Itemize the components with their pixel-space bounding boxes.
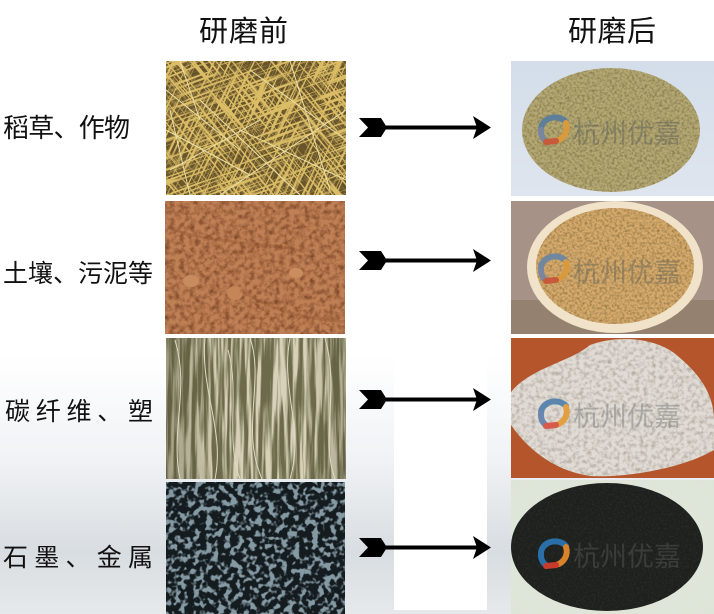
photo: straw powder after grinding bbox=[511, 61, 714, 196]
label: soil and sludge: 土壤、污泥等 bbox=[3, 260, 153, 288]
watermark: row 3: 杭州优嘉 bbox=[573, 402, 681, 432]
heading: after grinding: 研磨后 bbox=[568, 15, 656, 48]
label: carbon fibre and plastic: 碳纤维、塑 bbox=[5, 398, 153, 426]
photo: soil before grinding bbox=[165, 201, 345, 334]
arrow: row 3 bbox=[359, 388, 491, 411]
photo: white powder after grinding bbox=[511, 338, 714, 478]
label: graphite and metal: 石墨、金属 bbox=[3, 544, 153, 572]
watermark: row 4: 杭州优嘉 bbox=[573, 542, 681, 572]
arrow: row 1 bbox=[359, 116, 491, 139]
heading: before grinding: 研磨前 bbox=[199, 15, 288, 48]
arrow: row 4 bbox=[359, 536, 491, 559]
label: straw and crops: 稻草、作物 bbox=[3, 113, 130, 143]
photo: soil powder in bowl after grinding bbox=[511, 201, 714, 334]
photo: straw before grinding bbox=[166, 61, 346, 195]
photo: fibres before grinding bbox=[166, 338, 346, 479]
arrow: row 2 bbox=[359, 249, 491, 272]
watermark: row 1: 杭州优嘉 bbox=[573, 119, 681, 149]
white strip behind arrows bbox=[394, 340, 487, 610]
photo: coal before grinding bbox=[166, 482, 345, 614]
photo: black powder after grinding bbox=[511, 480, 714, 614]
watermark: row 2: 杭州优嘉 bbox=[573, 258, 681, 288]
